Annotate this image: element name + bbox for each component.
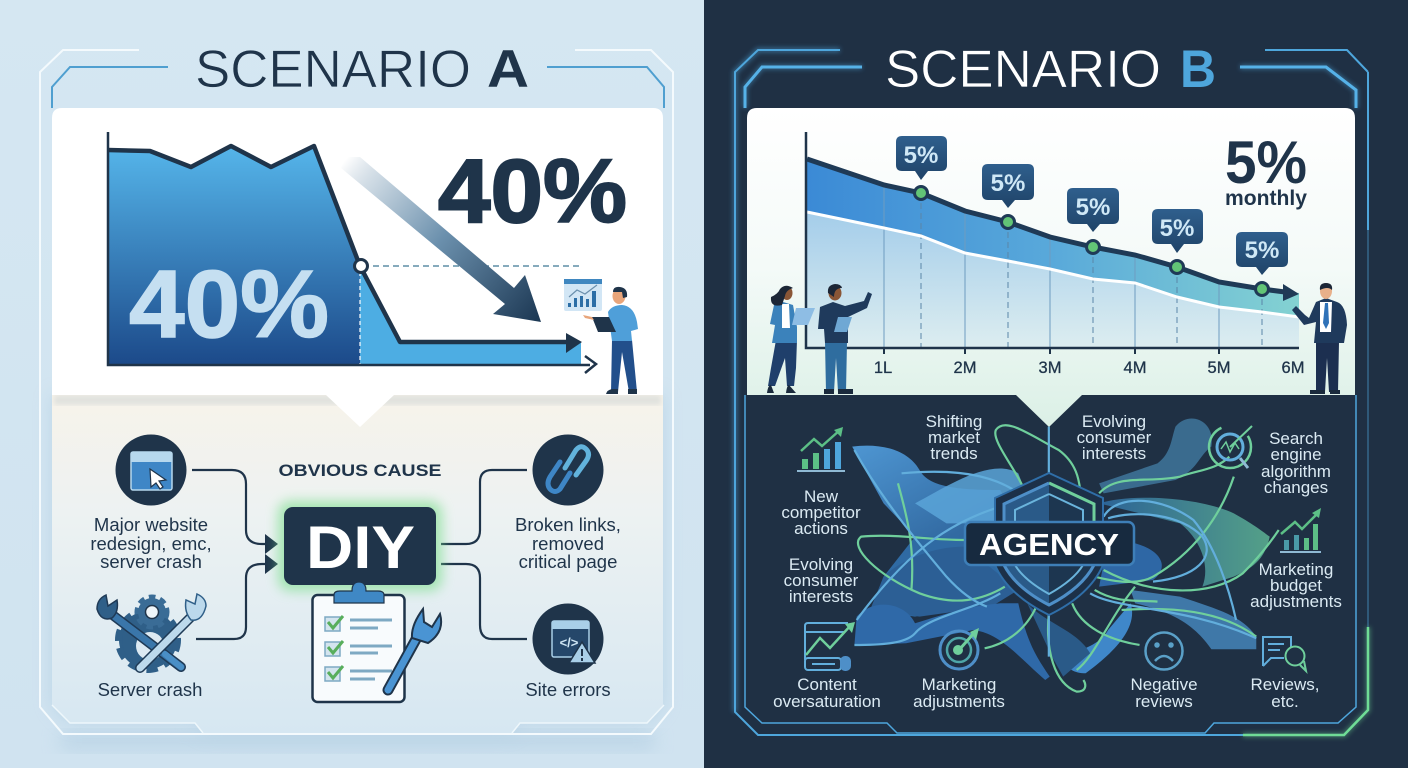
factor labels: etc. bbox=[1271, 692, 1299, 711]
factor labels: Evolving bbox=[789, 555, 853, 574]
icon: site errors: </> bbox=[560, 635, 579, 650]
factor labels: Shifting bbox=[926, 412, 982, 431]
icon: algorithm magnifier bbox=[1209, 426, 1252, 468]
text: major website redesign: server crash bbox=[100, 551, 202, 572]
icon: browser cursor bbox=[116, 434, 186, 506]
factor labels: consumer bbox=[1077, 428, 1152, 447]
factor labels: engine bbox=[1270, 445, 1322, 464]
factor labels: interests bbox=[789, 587, 853, 606]
icon: competitor growth chart bbox=[797, 427, 845, 471]
factor labels: budget bbox=[1270, 576, 1322, 595]
factor labels: Marketing bbox=[1259, 560, 1333, 579]
factor labels: consumer bbox=[784, 571, 859, 590]
factor labels: Evolving bbox=[1082, 412, 1146, 431]
panel: lower causes background bbox=[52, 395, 663, 733]
icon: clipboard checklist with wrench bbox=[312, 582, 441, 702]
factor labels: Content bbox=[797, 675, 857, 694]
connectors: causes to DIY bbox=[192, 470, 527, 639]
DIY badge: DIY bbox=[306, 514, 415, 581]
axis labels: months: 1L bbox=[874, 359, 892, 377]
text: site errors: Site errors bbox=[525, 679, 611, 700]
factor labels: Search bbox=[1269, 429, 1323, 448]
axis labels: months: 2M bbox=[954, 359, 976, 377]
area chart: 40% drop bbox=[108, 132, 596, 373]
heading: scenario B: B bbox=[1180, 40, 1216, 99]
icon: broken link bbox=[532, 434, 604, 506]
arrowheads into DIY bbox=[265, 534, 278, 574]
factor labels: Reviews, bbox=[1251, 675, 1319, 694]
callouts: 5% markers bbox=[896, 136, 1288, 296]
factor labels: algorithm bbox=[1261, 462, 1331, 481]
text: major website redesign: Major website bbox=[94, 514, 208, 535]
icon: site errors bbox=[532, 604, 604, 674]
panel: white chart card bbox=[52, 108, 663, 427]
frame: scenario B bbox=[735, 50, 1368, 735]
text: broken links: removed bbox=[532, 533, 604, 554]
heading: scenario A: SCENARIO bbox=[195, 40, 471, 99]
text: broken links: critical page bbox=[519, 551, 617, 572]
factor labels: actions bbox=[794, 519, 848, 538]
factor labels: adjustments bbox=[913, 692, 1005, 711]
icon: review bubbles bbox=[1263, 637, 1306, 671]
icon: wrenches and gear bbox=[97, 594, 206, 669]
icon: sad face bbox=[1146, 632, 1182, 670]
axis labels: months: 4M bbox=[1124, 359, 1146, 377]
icon: content oversaturation bbox=[805, 622, 855, 671]
factor labels: interests bbox=[1082, 444, 1146, 463]
shield with agency badge bbox=[965, 473, 1134, 615]
heading: scenario B: SCENARIO bbox=[885, 40, 1161, 99]
callouts: 5% markers: 5% bbox=[904, 142, 938, 169]
factor labels: competitor bbox=[781, 503, 861, 522]
big stat: 40% dark: 40% bbox=[438, 142, 627, 242]
factor labels: Marketing bbox=[922, 675, 996, 694]
panel: chart card bbox=[747, 108, 1355, 427]
icon: mini chart card bbox=[564, 279, 602, 311]
factor labels: trends bbox=[930, 444, 978, 463]
text: server crash: Server crash bbox=[98, 679, 202, 700]
figure: analyst with laptop bbox=[583, 287, 638, 394]
frame: scenario A bbox=[40, 50, 673, 734]
blobs bbox=[852, 419, 1270, 680]
heading: scenario A: A bbox=[487, 40, 529, 99]
axis labels: months bbox=[874, 359, 1304, 377]
factor labels: oversaturation bbox=[773, 692, 881, 711]
axis labels: months: 3M bbox=[1039, 359, 1061, 377]
factor labels: changes bbox=[1264, 478, 1328, 497]
callouts: 5% markers: 5% bbox=[1160, 215, 1194, 242]
big stat: 40% light: 40% bbox=[129, 251, 329, 358]
area chart: gradual decline bbox=[806, 132, 1299, 354]
icon: marketing target bbox=[940, 628, 979, 669]
panel: scenario B bbox=[704, 0, 1408, 768]
icon: budget growth chart bbox=[1280, 508, 1321, 552]
arrow: steep decline bbox=[341, 157, 541, 322]
curves bbox=[854, 425, 1279, 692]
factor labels: market bbox=[928, 428, 980, 447]
figure: man pointing bbox=[818, 284, 872, 394]
label: obvious cause: OBVIOUS CAUSE bbox=[278, 461, 442, 480]
callouts: 5% markers: 5% bbox=[991, 170, 1025, 197]
figure: woman with laptop bbox=[767, 286, 815, 393]
shield with agency badge: AGENCY bbox=[979, 527, 1119, 562]
text: broken links: Broken links, bbox=[515, 514, 621, 535]
text: major website redesign: redesign, emc, bbox=[90, 533, 212, 554]
big stat: 5% monthly: 5% bbox=[1225, 129, 1307, 196]
factor labels: reviews bbox=[1135, 692, 1193, 711]
figure: presenter in suit bbox=[1292, 283, 1347, 394]
factor labels: Negative bbox=[1130, 675, 1198, 694]
panel: scenario A bbox=[0, 0, 704, 768]
factor labels: adjustments bbox=[1250, 592, 1342, 611]
axis labels: months: 5M bbox=[1208, 359, 1230, 377]
axis labels: months: 6M bbox=[1282, 359, 1304, 377]
DIY badge bbox=[278, 501, 442, 591]
factor labels bbox=[773, 412, 1342, 711]
network: agency influence factors bbox=[852, 419, 1279, 692]
big stat: 5% monthly: monthly bbox=[1225, 187, 1307, 210]
callouts: 5% markers: 5% bbox=[1245, 237, 1279, 264]
factor labels: New bbox=[804, 487, 839, 506]
callouts: 5% markers: 5% bbox=[1076, 194, 1110, 221]
